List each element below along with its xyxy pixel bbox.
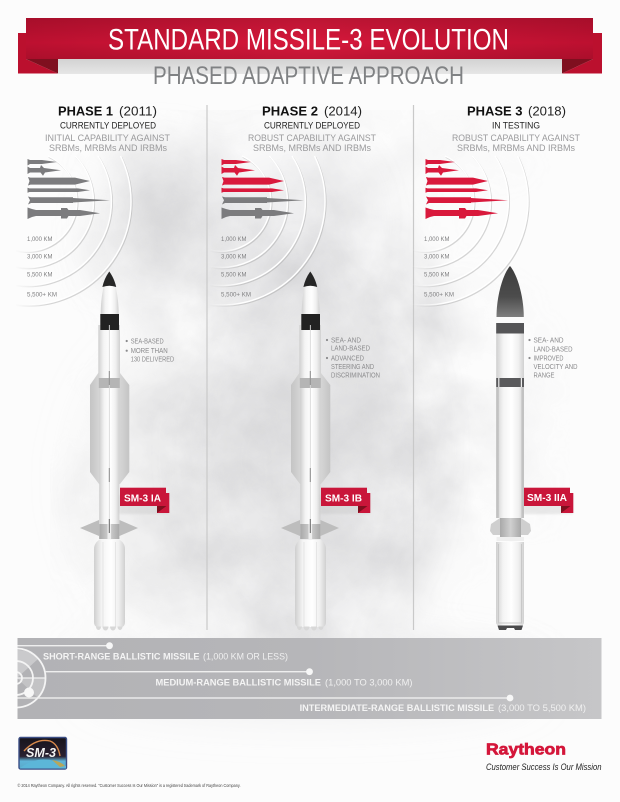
bullet list: SEA- AND <box>534 338 564 344</box>
icon: SM-3 logo: SM-3 <box>26 745 57 760</box>
missile: SM-3 IIA <box>490 266 531 630</box>
bullet list: ADVANCED <box>331 356 364 362</box>
label: short range: SHORT-RANGE BALLISTIC MISSILE <box>43 652 200 662</box>
bullet list <box>126 338 174 364</box>
heading: phase 2 <box>262 104 362 118</box>
panel: phase 3 <box>412 104 580 630</box>
label: short range: (1,000 KM OR LESS) <box>203 652 288 662</box>
tag: SM-3 IB <box>320 488 370 514</box>
grey band <box>58 59 562 74</box>
ribbon tails <box>18 33 602 74</box>
range arcs <box>209 156 326 306</box>
capability text: ROBUST CAPABILITY AGAINST <box>248 133 376 143</box>
heading: phase 3: PHASE 3 <box>467 104 523 118</box>
heading: phase 1: PHASE 1 <box>58 104 113 118</box>
bullet list: 130 DELIVERED <box>131 356 174 364</box>
range line: intermediate <box>18 695 513 701</box>
bullet list <box>528 338 578 380</box>
range labels: 3,000 KM <box>27 254 52 260</box>
bullet list: SEA- AND <box>331 338 361 344</box>
bullet list: LAND-BASED <box>331 346 370 352</box>
missile: SM-3 IA <box>80 272 138 630</box>
capability text: SRBMs, MRBMs AND IRBMs <box>49 143 167 153</box>
capability text <box>452 133 580 153</box>
threat silhouettes <box>426 159 508 219</box>
capability text: SRBMs, MRBMs AND IRBMs <box>457 143 575 153</box>
bullet list: MORE THAN <box>131 348 168 355</box>
heading: phase 3: (2018) <box>528 104 566 118</box>
capability text <box>45 133 170 153</box>
range labels: 3,000 KM <box>424 254 450 260</box>
bullet list: STEERING AND <box>331 364 374 371</box>
bullet list: LAND-BASED <box>534 346 572 354</box>
copyright: © 2014 Raytheon Company. All rights reserved. "Customer Success Is Our Mission" is a registered trademark of Raytheon Company. <box>18 783 241 788</box>
threat silhouettes <box>222 159 304 219</box>
range labels: 5,500+ KM <box>27 292 57 298</box>
panel: range legend <box>0 638 602 719</box>
range line: medium <box>45 668 313 675</box>
range labels: 5,500 KM <box>221 272 246 278</box>
legend background <box>18 638 602 719</box>
label: medium range <box>156 678 412 688</box>
capability text: SRBMs, MRBMs AND IRBMs <box>253 143 371 153</box>
range arcs <box>15 156 132 306</box>
range labels: 5,500 KM <box>424 272 450 278</box>
ribbon main <box>26 18 593 59</box>
capability text: INITIAL CAPABILITY AGAINST <box>45 133 170 143</box>
bullet list: RANGE <box>534 372 555 380</box>
heading: phase 1: (2011) <box>119 104 157 118</box>
heading: phase 3 <box>467 104 566 118</box>
title: STANDARD MISSILE-3 EVOLUTION <box>108 24 509 56</box>
range labels <box>27 236 57 298</box>
heading: phase 2: PHASE 2 <box>262 104 318 118</box>
tag: SM-3 IIA: SM-3 IIA <box>527 492 567 504</box>
label: intermediate range: INTERMEDIATE-RANGE BALLISTIC MISSILE <box>300 703 495 714</box>
range labels: 1,000 KM <box>27 236 52 243</box>
tag: SM-3 IA <box>119 488 169 514</box>
bullet list: DISCRIMINATION <box>331 372 380 380</box>
panel: phase 2 <box>209 104 380 630</box>
label: medium range: (1,000 TO 3,000 KM) <box>325 678 412 688</box>
label: intermediate range: (3,000 TO 5,500 KM) <box>498 703 586 714</box>
panel: phase 1 <box>15 104 174 630</box>
subtitle: PHASED ADAPTIVE APPROACH <box>153 62 464 90</box>
range labels <box>424 236 454 298</box>
ribbon folds <box>26 59 593 74</box>
status: CURRENTLY DEPLOYED <box>60 120 156 130</box>
column dividers <box>207 105 414 630</box>
range labels: 1,000 KM <box>424 236 450 243</box>
threat silhouettes <box>28 159 110 219</box>
missile: SM-3 IB <box>281 272 339 630</box>
range labels <box>221 236 251 298</box>
logo: Raytheon: Raytheon <box>486 742 566 758</box>
icon: SM-3 logo <box>19 738 66 769</box>
bullet list: SEA-BASED <box>131 338 164 346</box>
range line: short <box>18 642 113 649</box>
range labels: 3,000 KM <box>221 254 246 260</box>
status: IN TESTING <box>492 120 540 130</box>
icon: radar <box>18 648 46 708</box>
capability text: ROBUST CAPABILITY AGAINST <box>452 133 580 143</box>
tag: SM-3 IA: SM-3 IA <box>124 492 161 504</box>
status: CURRENTLY DEPLOYED <box>264 120 360 130</box>
bullet list <box>326 338 380 380</box>
smoke background <box>50 110 570 710</box>
range labels: 5,500 KM <box>27 272 52 278</box>
label: medium range: MEDIUM-RANGE BALLISTIC MISSILE <box>156 678 322 688</box>
range arcs <box>412 156 529 306</box>
range labels: 1,000 KM <box>221 236 246 243</box>
heading: phase 2: (2014) <box>324 104 362 118</box>
label: short range <box>43 652 288 662</box>
range labels: 5,500+ KM <box>424 292 454 298</box>
tag: SM-3 IB: SM-3 IB <box>325 492 362 504</box>
banner <box>18 18 602 74</box>
tag: SM-3 IIA <box>523 488 573 514</box>
heading: phase 1 <box>58 104 157 118</box>
capability text <box>248 133 376 153</box>
range labels: 5,500+ KM <box>221 292 251 298</box>
bullet list: VELOCITY AND <box>534 364 578 371</box>
bullet list: IMPROVED <box>534 356 564 362</box>
